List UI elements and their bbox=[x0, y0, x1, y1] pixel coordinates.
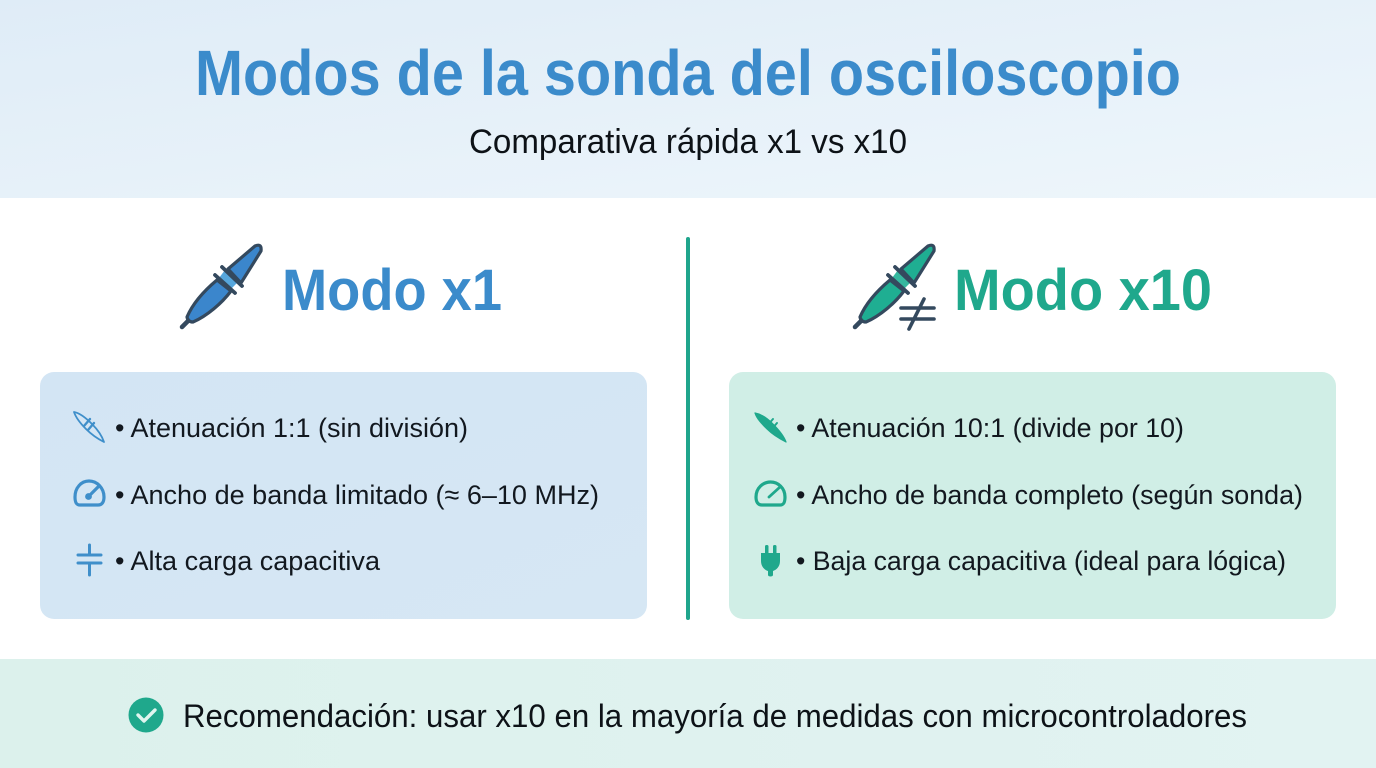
icon: green probe with not-equal bbox=[855, 245, 934, 329]
title: Modos de la sonda del osciloscopio bbox=[195, 37, 1181, 109]
panel: Modo x10 bbox=[855, 245, 1212, 329]
center divider bbox=[686, 237, 690, 620]
icon: check circle bbox=[128, 698, 164, 732]
icon: capacitor bbox=[78, 545, 101, 575]
icon: plug bbox=[761, 545, 780, 576]
text: capacitive load: • Baja carga capacitiva (ideal para lógica) bbox=[796, 546, 1286, 576]
panel: x10 features bbox=[729, 372, 1336, 619]
panel: x1 features bbox=[40, 372, 647, 619]
panel: Modo x1 bbox=[182, 245, 502, 327]
text: capacitive load: • Alta carga capacitiva bbox=[115, 546, 381, 576]
icon: solid probe bbox=[755, 413, 786, 442]
recommendation text: Recomendación: usar x10 en la mayoría de medidas con microcontroladores bbox=[183, 698, 1247, 734]
text: attenuation: • Atenuación 10:1 (divide por 10) bbox=[796, 413, 1184, 443]
icon: gauge bbox=[756, 482, 785, 505]
text: bandwidth: • Ancho de banda completo (según sonda) bbox=[796, 480, 1303, 510]
footer band bbox=[0, 659, 1376, 768]
subtitle: Comparativa rápida x1 vs x10 bbox=[469, 123, 907, 161]
icon: thin probe bbox=[74, 412, 104, 442]
text: bandwidth: • Ancho de banda limitado (≈ 6–10 MHz) bbox=[115, 480, 599, 510]
heading: Modo x10: Modo x10 bbox=[954, 258, 1212, 323]
icon: blue probe bbox=[182, 245, 261, 327]
text: attenuation: • Atenuación 1:1 (sin división) bbox=[115, 413, 468, 443]
header band bbox=[0, 0, 1376, 198]
icon: gauge bbox=[75, 481, 104, 505]
heading: Modo x1: Modo x1 bbox=[282, 258, 502, 323]
